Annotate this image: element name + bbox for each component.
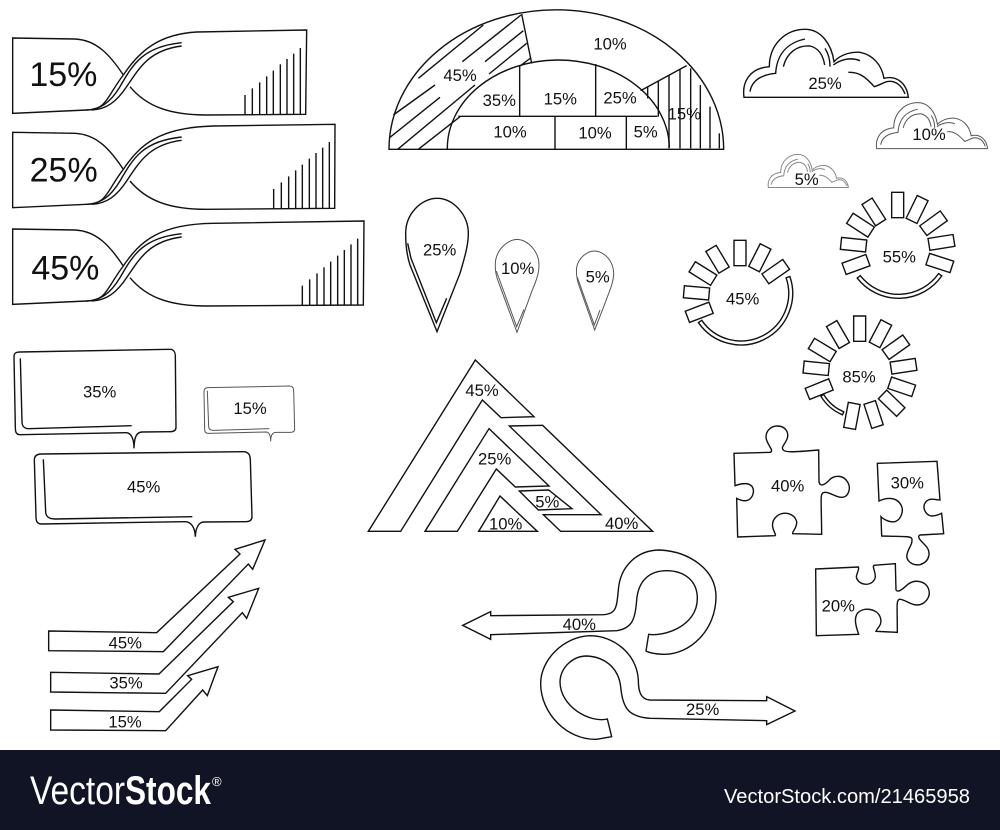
- arrow: 15%: [51, 667, 218, 731]
- pin: 10%: 10%: [501, 259, 535, 278]
- triangle pyramid diagram: [368, 360, 653, 533]
- cloud: 25%: [744, 29, 908, 97]
- ring: 55%: [840, 192, 955, 298]
- pin: 5%: [576, 251, 614, 330]
- speech bubbles: [14, 349, 295, 537]
- arrow: 35%: [51, 588, 259, 693]
- ribbon: 15%: [13, 30, 307, 115]
- pin: 10%: [495, 239, 539, 332]
- hatching: 15% segment: [648, 68, 719, 148]
- puzzle piece: 30%: 30%: [891, 473, 924, 492]
- ribbon: 25%: 25%: [30, 152, 98, 190]
- ribbon: 15%: 15%: [29, 56, 97, 94]
- bubble: 15%: 15%: [233, 399, 267, 418]
- semicircle chart: [389, 10, 724, 149]
- pin: 25%: 25%: [423, 240, 457, 259]
- watermark footer bar: [0, 750, 1000, 830]
- segment: 25%: 25%: [478, 449, 512, 468]
- hatching: 45% segment: [390, 15, 531, 149]
- puzzle piece: 40%: 40%: [771, 477, 805, 496]
- pin: 25%: [406, 198, 468, 332]
- arrow: 45%: 45%: [109, 633, 142, 652]
- semicircle chart: 25%: [603, 88, 637, 107]
- puzzle pieces: [734, 426, 944, 636]
- arrow: 15%: 15%: [108, 712, 142, 731]
- arrow: 45%: [49, 540, 265, 652]
- watermark logo: Stock: [125, 769, 212, 813]
- inner arc: [447, 60, 669, 149]
- bubble: 45%: [34, 452, 252, 537]
- watermark id: VectorStock.com/21465958: [724, 786, 970, 808]
- segment: 40%: [509, 425, 653, 533]
- semicircle chart: 10%: [493, 123, 527, 142]
- segment: 10%: 10%: [489, 514, 523, 533]
- upward arrows: [49, 540, 265, 731]
- semicircle chart: 10%: [578, 123, 612, 142]
- map pins: [406, 198, 614, 332]
- arrow: 25%: 25%: [686, 700, 720, 719]
- cloud: 10%: 10%: [912, 125, 946, 144]
- watermark logo: [30, 769, 222, 813]
- cloud: 5%: [768, 154, 848, 189]
- watermark logo: Vector: [30, 769, 125, 813]
- ribbon: 45%: [13, 221, 364, 306]
- ribbon banner group: [13, 30, 364, 306]
- semicircle chart: 15%: [668, 104, 701, 123]
- puzzle piece: 20%: [816, 564, 929, 636]
- progress rings: [683, 192, 955, 429]
- arrow: 25%: [541, 636, 795, 739]
- cloud: 5%: 5%: [795, 170, 819, 189]
- segment: 25%: [425, 429, 549, 531]
- segment: 45%: 45%: [465, 381, 499, 400]
- arrow: 40%: [463, 550, 716, 654]
- ring: 55%: 55%: [883, 248, 916, 267]
- outer arc and baseline: [389, 10, 724, 149]
- ribbon: 45%: 45%: [31, 249, 99, 287]
- arrow: 40%: 40%: [563, 615, 596, 634]
- bubble: 35%: [14, 349, 176, 448]
- ring: 45%: [683, 240, 793, 345]
- segment: 45%: [368, 360, 534, 531]
- bubble: 45%: 45%: [127, 477, 161, 496]
- semicircle chart: 10%: [593, 34, 627, 53]
- semicircle chart: 45%: [443, 66, 477, 85]
- curved arrows: [463, 550, 795, 739]
- ring: 85%: 85%: [842, 367, 876, 386]
- segment: 5%: [519, 490, 572, 512]
- cloud: 25%: 25%: [808, 74, 842, 93]
- watermark logo: ®: [212, 774, 222, 789]
- bubble: 15%: [204, 386, 295, 441]
- semicircle chart: 35%: [483, 91, 516, 110]
- puzzle piece: 20%: 20%: [822, 597, 855, 616]
- puzzle piece: 40%: [734, 426, 849, 537]
- cloud: 10%: [876, 103, 988, 149]
- arrow: 35%: 35%: [109, 673, 143, 692]
- semicircle chart: 15%: [544, 89, 577, 108]
- semicircle chart: 5%: [634, 122, 658, 141]
- dividers: [458, 14, 687, 149]
- segment: 40%: 40%: [605, 514, 639, 533]
- ring: 45%: 45%: [726, 289, 760, 308]
- bubble: 35%: 35%: [83, 382, 117, 401]
- pin: 5%: 5%: [586, 267, 610, 286]
- segment: 5%: 5%: [535, 493, 560, 512]
- segment: 10%: [479, 496, 537, 533]
- ring: 85%: [803, 316, 917, 429]
- ribbon: 25%: [13, 124, 335, 209]
- puzzle piece: 30%: [877, 461, 944, 565]
